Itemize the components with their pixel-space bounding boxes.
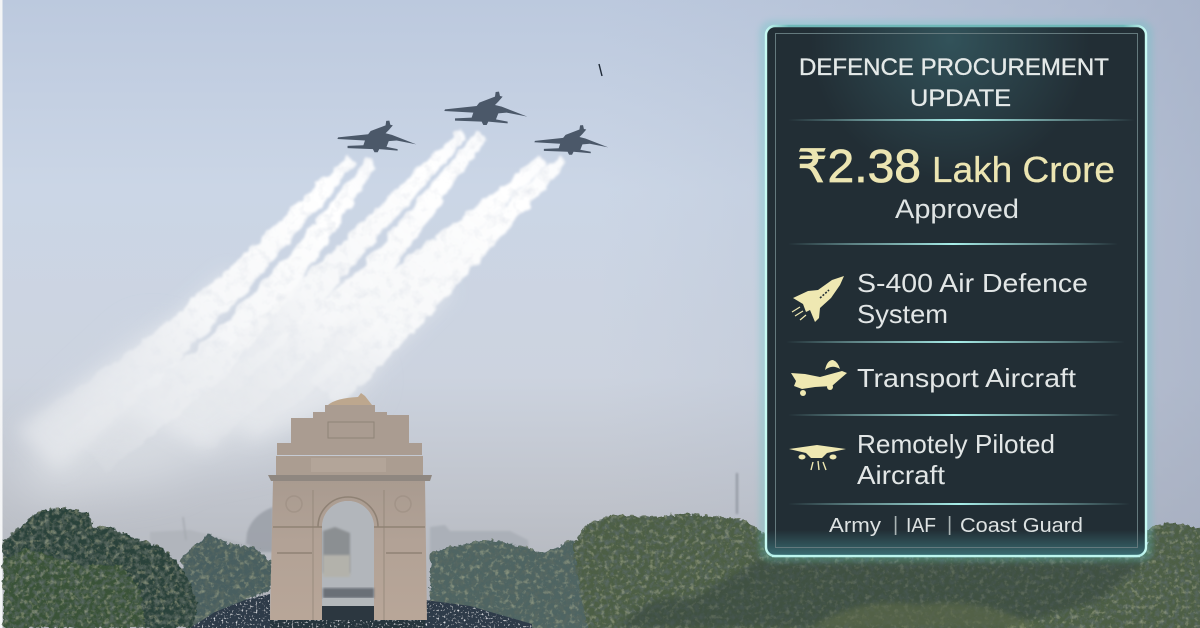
headline figure	[797, 140, 1115, 192]
services footer: Coast Guard	[960, 515, 1083, 537]
inscription panel	[328, 422, 374, 438]
distant buildings and tower	[150, 473, 737, 565]
distant speck	[599, 64, 602, 76]
jet: left	[337, 121, 416, 152]
cornice	[268, 475, 432, 481]
label	[857, 268, 1088, 329]
headline figure: Lakh Crore	[932, 149, 1115, 190]
view through arch	[322, 501, 374, 620]
label	[857, 429, 1055, 490]
smoke trails	[16, 129, 566, 471]
dome	[328, 393, 372, 405]
panel: procurement update card	[759, 20, 1153, 562]
label: Remotely Piloted	[857, 429, 1055, 459]
stepped attic	[277, 405, 422, 455]
item: Remotely Piloted Aircraft	[789, 429, 1055, 490]
heading	[799, 54, 1109, 112]
services footer: |	[893, 514, 898, 536]
heading: DEFENCE PROCUREMENT	[799, 54, 1109, 81]
piers and arch	[270, 481, 427, 620]
icon: drone	[789, 445, 846, 470]
item: S-400 Air Defence System	[792, 268, 1088, 329]
arch mouldings	[273, 490, 425, 620]
jet: centre	[444, 92, 527, 125]
services footer: Army	[829, 515, 881, 537]
icon: missile jet	[792, 276, 844, 322]
tree mass: right background and canopy	[430, 513, 1200, 628]
label: System	[857, 299, 948, 329]
label: Transport Aircraft	[857, 363, 1077, 393]
icon: transport plane	[791, 360, 847, 396]
smoke glow under trails	[16, 270, 454, 471]
frieze	[276, 456, 423, 475]
heading: UPDATE	[910, 85, 1011, 112]
headline figure: ₹2.38	[797, 140, 921, 192]
services footer: |	[947, 514, 952, 536]
services footer	[829, 514, 1083, 537]
panel background	[759, 20, 1153, 562]
formation of three fighter jets	[337, 92, 608, 155]
far tree line, hazy	[182, 533, 272, 628]
hazy smoke drift	[20, 320, 370, 500]
label: Aircraft	[857, 460, 946, 490]
India Gate monument	[268, 393, 432, 620]
jet: right	[534, 125, 608, 155]
item: Transport Aircraft	[791, 360, 1077, 396]
tree mass: left foreground	[3, 508, 197, 628]
services footer: IAF	[906, 515, 936, 537]
label: S-400 Air Defence	[857, 268, 1088, 298]
approved label: Approved	[895, 194, 1019, 224]
crowd	[190, 594, 532, 628]
